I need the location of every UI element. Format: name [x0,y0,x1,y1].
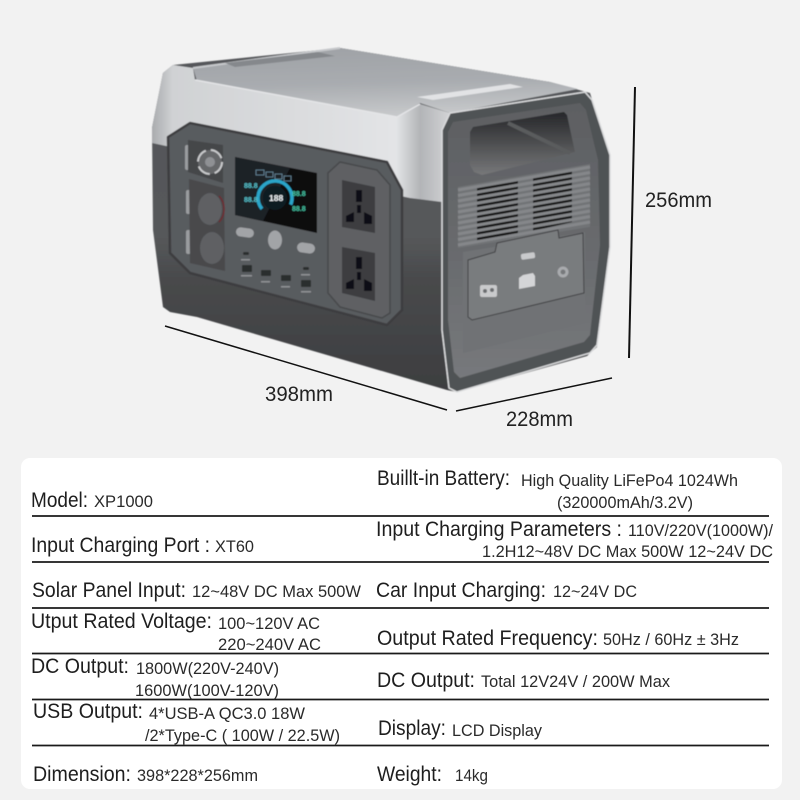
spec: dimension [33,763,258,786]
top surface [193,48,578,117]
dimension line: height [629,87,635,358]
spec: built-in battery: (320000mAh/3.2V) [557,493,693,512]
spec: DC output right: DC Output: [377,669,475,692]
dimension label: width: 228mm [506,408,573,431]
dimension line: width [456,378,612,411]
cigarette lighter port [188,140,223,183]
spec: solar panel input: Solar Panel Input: [32,579,186,602]
spec: built-in battery: High Quality LiFePo4 1024Wh [521,471,738,490]
icon: round charging port [558,266,568,278]
USB ports [242,252,311,287]
spec: output rated frequency [377,627,739,650]
spec: output rated voltage: 220~240V AC [218,635,321,654]
spec: dimension: 398*228*256mm [137,766,258,785]
spec: input charging parameters: Input Charging Parameters : [376,518,622,541]
DC output ports with caps [189,179,225,271]
screen gauge [251,174,299,222]
spec: output rated voltage: Utput Rated Voltage: [31,610,212,633]
spec: output rated voltage: 100~120V AC [218,614,320,633]
spec: model: XP1000 [94,492,153,511]
screen battery reading: 188 [269,193,283,203]
silver upper front shell [152,65,450,202]
spec: model [31,489,153,512]
dimension line: length [165,326,447,410]
spec: solar panel input [32,579,361,602]
screen right readings: 88.8 [292,191,306,198]
spec: input charging port: XT60 [215,537,254,556]
spec: DC output left: 1600W(100V-120V) [135,681,279,700]
spec: model: Model: [31,489,88,512]
spec: dimension: Dimension: [33,763,131,786]
spec: DC output right [377,669,670,692]
dimension label: length: 398mm [265,383,333,406]
spec: car input charging: 12~24V DC [553,582,637,601]
spec: weight: Weight: [377,763,442,786]
top handle recess [193,48,523,117]
control buttons [235,227,316,254]
AC socket upper [342,180,375,233]
side ventilation grille [458,164,590,248]
spec: built-in battery [377,467,738,512]
side face carry handle opening [470,112,575,175]
spec: USB output: /2*Type-C ( 100W / 22.5W) [145,726,340,745]
front control panel [168,123,402,325]
panel: specification table [21,458,782,789]
screen left readings: 88.8 [244,197,258,204]
side lower inset [463,232,585,353]
spec: built-in battery: Buillt-in Battery: [377,467,510,490]
spec: display: Display: [378,717,446,740]
spec: DC output left: 1800W(220V-240V) [136,659,279,678]
spec: display [378,717,542,740]
spec: output rated frequency: Output Rated Frequency: [377,627,598,650]
AC socket lower [342,247,375,301]
spec: display: LCD Display [452,721,542,740]
spec: DC output left [31,655,279,700]
spec: input charging parameters: 1.2H12~48V DC Max 500W 12~24V DC [482,542,773,561]
spec: output rated voltage [31,610,321,654]
spec: USB output: 4*USB-A QC3.0 18W [149,704,305,723]
dimension label: height: 256mm [645,189,712,212]
left power switches [185,145,191,254]
spec: weight [377,763,488,786]
port caption marks [241,259,311,292]
icon: brand badge [521,252,535,260]
screen left readings: 88.8 [244,183,258,190]
spec: DC output left: DC Output: [31,655,129,678]
spec: output rated frequency: 50Hz / 60Hz ± 3Hz [603,630,739,649]
spec: car input charging: Car Input Charging: [376,579,546,602]
screen status icons [256,170,291,181]
side face plate [442,92,610,392]
side face inset [448,103,600,378]
spec: input charging parameters: 110V/220V(1000W)/ [628,521,773,540]
spec: input charging parameters [376,518,773,561]
spec: weight: 14kg [455,766,488,785]
screen left readings [244,183,258,204]
icon: DC input port [480,285,497,297]
screen right readings: 88.8 [292,206,306,213]
spec: solar panel input: 12~48V DC Max 500W [192,582,361,601]
spec: USB output: USB Output: [33,700,143,723]
spec: DC output right: Total 12V24V / 200W Max [481,672,670,691]
product: portable power station [152,48,610,392]
spec: input charging port: Input Charging Port : [31,534,210,557]
LCD screen [235,157,317,233]
spec: USB output [33,700,340,745]
side port cover [468,230,584,320]
icon: AC input port [519,273,535,289]
AC socket panel [328,162,390,318]
body silhouette [152,48,610,392]
screen right readings [292,191,306,213]
